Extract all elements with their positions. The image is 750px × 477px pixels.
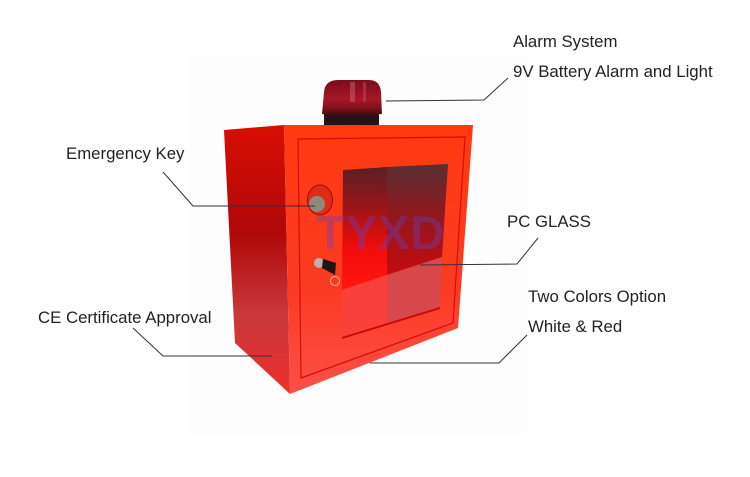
cabinet side [224, 125, 290, 394]
callout: PC glass: PC GLASS [507, 212, 591, 231]
callout: two colors [370, 287, 666, 363]
callout: emergency key: Emergency Key [66, 144, 185, 163]
callout: CE certificate: CE Certificate Approval [38, 308, 211, 327]
callout: CE certificate [38, 308, 272, 356]
door lock and key [314, 258, 340, 286]
callout: two colors: White & Red [528, 317, 622, 336]
key hole with emergency key [308, 185, 332, 215]
photo background [189, 55, 527, 435]
callout: alarm system: Alarm System [513, 32, 617, 51]
callout: emergency key [66, 144, 315, 206]
callout: alarm system [386, 32, 713, 101]
watermark: TYXD [316, 206, 445, 259]
callout: PC glass [420, 212, 591, 265]
icon: alarm beacon [322, 80, 382, 125]
cabinet front [284, 125, 473, 394]
callout: two colors: Two Colors Option [528, 287, 666, 306]
door frame [298, 137, 465, 378]
callout: alarm system: 9V Battery Alarm and Light [513, 62, 713, 81]
icon: red alarm cabinet [224, 80, 473, 394]
glass window [342, 164, 448, 339]
